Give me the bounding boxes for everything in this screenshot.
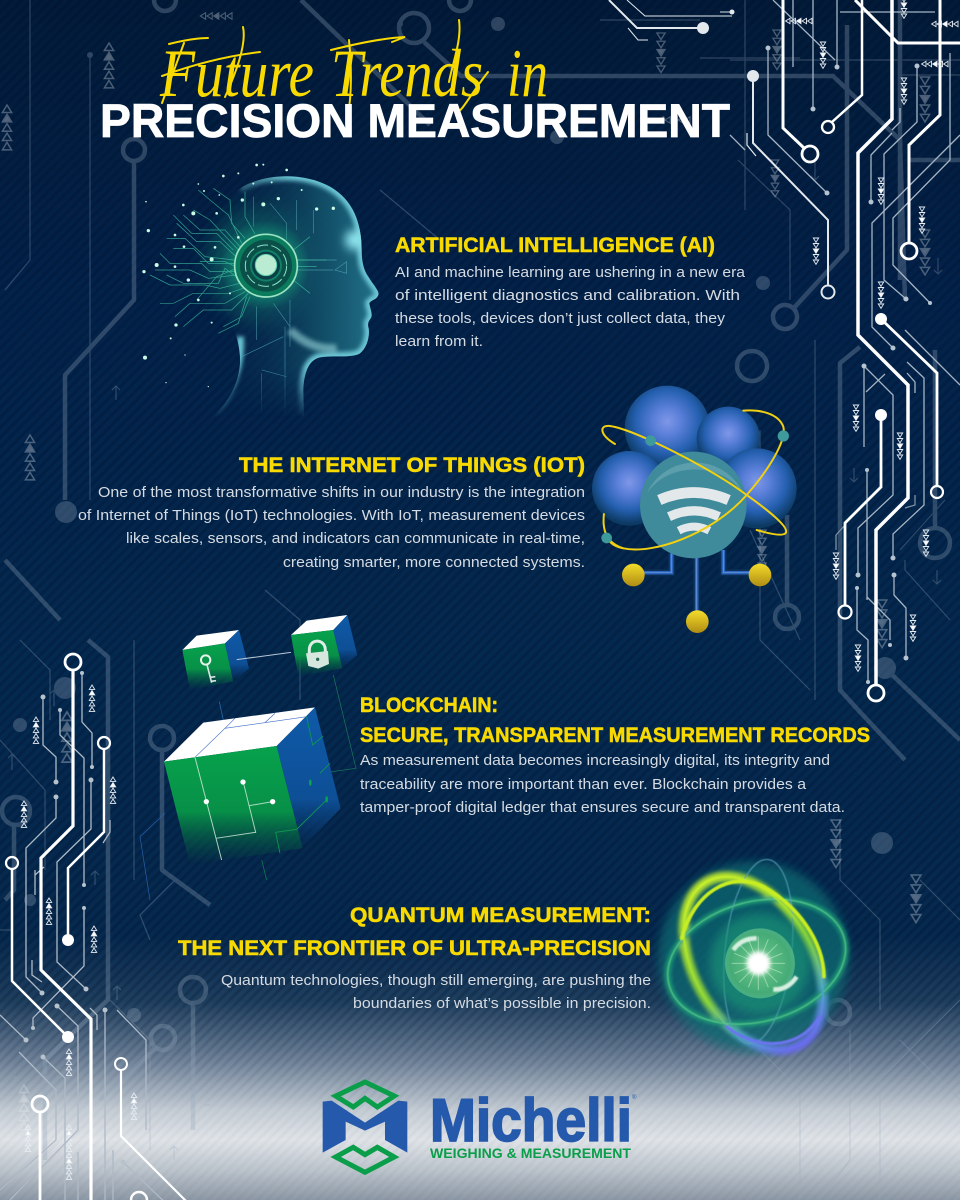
body: internet of things: of Internet of Things (IoT) technologies. With IoT, measurement devices bbox=[78, 507, 585, 524]
panel: blockchain bbox=[140, 615, 870, 900]
title script line: in bbox=[507, 35, 548, 111]
body: blockchain: As measurement data becomes increasingly digital, its integrity and bbox=[360, 752, 830, 769]
heading: quantum measurement: QUANTUM MEASUREMENT: bbox=[350, 904, 651, 927]
title script line: Future bbox=[159, 35, 314, 111]
heading: artificial intelligence: ARTIFICIAL INTELLIGENCE (AI) bbox=[395, 234, 715, 257]
icon: glowing atom bbox=[654, 852, 860, 1074]
body: internet of things: like scales, sensors, and indicators can communicate in real-time, bbox=[126, 530, 585, 547]
icon: AI head with circuit brain bbox=[142, 164, 379, 417]
registered mark: ® bbox=[632, 1094, 637, 1101]
logo: Michelli Weighing & Measurement bbox=[323, 1082, 637, 1172]
panel: quantum measurement bbox=[178, 852, 860, 1074]
body: quantum measurement bbox=[221, 972, 651, 1012]
heading: internet of things: THE INTERNET OF THINGS (IOT) bbox=[239, 454, 585, 477]
title script line: Trends bbox=[331, 35, 483, 111]
body: internet of things: One of the most transformative shifts in our industry is the integration bbox=[98, 484, 585, 501]
body: quantum measurement: Quantum technologies, though still emerging, are pushing the bbox=[221, 972, 651, 989]
body: artificial intelligence: these tools, devices don’t just collect data, they bbox=[395, 310, 726, 327]
heading: quantum measurement: THE NEXT FRONTIER OF ULTRA-PRECISION bbox=[178, 937, 651, 960]
heading: blockchain bbox=[360, 694, 870, 747]
icon: blockchain cubes with key and lock bbox=[140, 615, 357, 900]
body: artificial intelligence: learn from it. bbox=[395, 333, 483, 350]
tagline: WEIGHING & MEASUREMENT bbox=[430, 1146, 632, 1161]
panel: artificial intelligence bbox=[142, 164, 746, 417]
icon: key cube bbox=[182, 630, 249, 690]
circuit traces: thin lines right bbox=[720, 0, 960, 684]
heading: blockchain: BLOCKCHAIN: bbox=[360, 694, 498, 717]
wordmark: Michelli bbox=[430, 1087, 632, 1154]
title bbox=[100, 20, 730, 147]
body: quantum measurement: boundaries of what’s possible in precision. bbox=[353, 995, 651, 1012]
body: internet of things bbox=[78, 484, 585, 571]
icon: Michelli emblem bbox=[323, 1082, 407, 1172]
icon: lock cube bbox=[291, 615, 357, 677]
body: artificial intelligence: AI and machine learning are ushering in a new era bbox=[395, 264, 746, 281]
body: artificial intelligence bbox=[395, 264, 746, 350]
panel: internet of things bbox=[78, 386, 797, 633]
icon: wifi cloud with orbits bbox=[592, 386, 797, 633]
title main line: PRECISION MEASUREMENT bbox=[100, 94, 730, 147]
title script line bbox=[159, 20, 548, 113]
body: internet of things: creating smarter, more connected systems. bbox=[283, 554, 585, 571]
body: artificial intelligence: of intelligent diagnostics and calibration. With bbox=[395, 287, 740, 304]
body: blockchain: tamper-proof digital ledger that ensures secure and transparent data. bbox=[360, 799, 845, 816]
circuit traces: bold white lines right bbox=[783, 0, 960, 701]
body: blockchain: traceability are more important than ever. Blockchain provides a bbox=[360, 776, 807, 793]
heading: quantum measurement bbox=[178, 904, 651, 960]
heading: blockchain: SECURE, TRANSPARENT MEASUREMENT RECORDS bbox=[360, 724, 870, 747]
icon: large cube bbox=[164, 707, 341, 880]
circuit traces: left white and thin lines bbox=[0, 654, 190, 1200]
body: blockchain bbox=[360, 752, 845, 816]
circuit traces: grey-white lines top right bbox=[609, 0, 834, 298]
